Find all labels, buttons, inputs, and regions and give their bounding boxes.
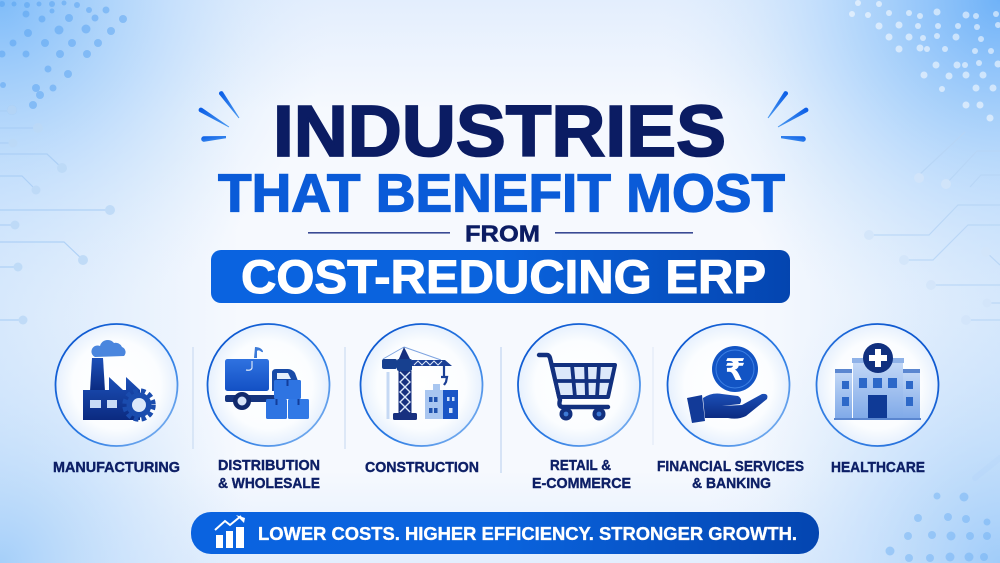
dot pattern: top right bbox=[849, 0, 1000, 122]
panel: manufacturing bbox=[53, 324, 180, 476]
label: distribution and wholesale: DISTRIBUTION bbox=[218, 457, 320, 474]
icon: delivery truck bbox=[225, 347, 309, 419]
icon: hand holding rupee coin bbox=[687, 346, 767, 423]
icon: growth chart bbox=[215, 515, 245, 548]
panel: healthcare bbox=[816, 324, 938, 476]
label: retail and e-commerce bbox=[532, 457, 631, 492]
footer text: LOWER COSTS. HIGHER EFFICIENCY. STRONGER GROWTH. bbox=[258, 523, 797, 544]
panel: distribution and wholesale bbox=[208, 324, 330, 492]
label: distribution and wholesale bbox=[218, 457, 320, 492]
label: financial services and banking: FINANCIAL SERVICES bbox=[657, 458, 804, 475]
icon: gear bbox=[124, 390, 154, 420]
panel: retail and e-commerce bbox=[518, 324, 640, 492]
dot pattern: top left bbox=[0, 0, 127, 115]
subtitle: that benefit most: THAT BENEFIT MOST bbox=[218, 164, 785, 224]
label: financial services and banking: & BANKING bbox=[692, 475, 771, 492]
icon: hospital bbox=[834, 343, 921, 420]
label: distribution and wholesale: & WHOLESALE bbox=[218, 475, 320, 492]
dot pattern: bottom right bbox=[886, 458, 1000, 562]
icon: shopping cart bbox=[539, 355, 615, 420]
label: financial services and banking bbox=[657, 458, 804, 492]
panel: construction bbox=[360, 324, 482, 476]
title: industries: INDUSTRIES bbox=[273, 92, 726, 172]
label: retail and e-commerce: E-COMMERCE bbox=[532, 475, 631, 492]
label: manufacturing: MANUFACTURING bbox=[53, 459, 180, 476]
from with rules: FROM bbox=[465, 220, 540, 246]
circuit lines: right bbox=[864, 132, 1000, 325]
banner: cost-reducing erp: COST-REDUCING ERP bbox=[241, 250, 766, 303]
icon: hand holding rupee coin: ₹ bbox=[725, 353, 745, 388]
sparks: left bbox=[199, 91, 239, 142]
label: healthcare: HEALTHCARE bbox=[831, 459, 925, 476]
icon: tower crane and building bbox=[382, 347, 458, 420]
label: retail and e-commerce: RETAIL & bbox=[550, 457, 611, 474]
footer banner bbox=[191, 512, 819, 554]
sparks: right bbox=[768, 91, 808, 142]
circuit lines: left bbox=[0, 105, 115, 324]
icon: factory bbox=[83, 340, 154, 420]
panel: financial services and banking bbox=[657, 324, 804, 492]
label: construction: CONSTRUCTION bbox=[365, 459, 479, 476]
dividers bbox=[193, 347, 653, 473]
